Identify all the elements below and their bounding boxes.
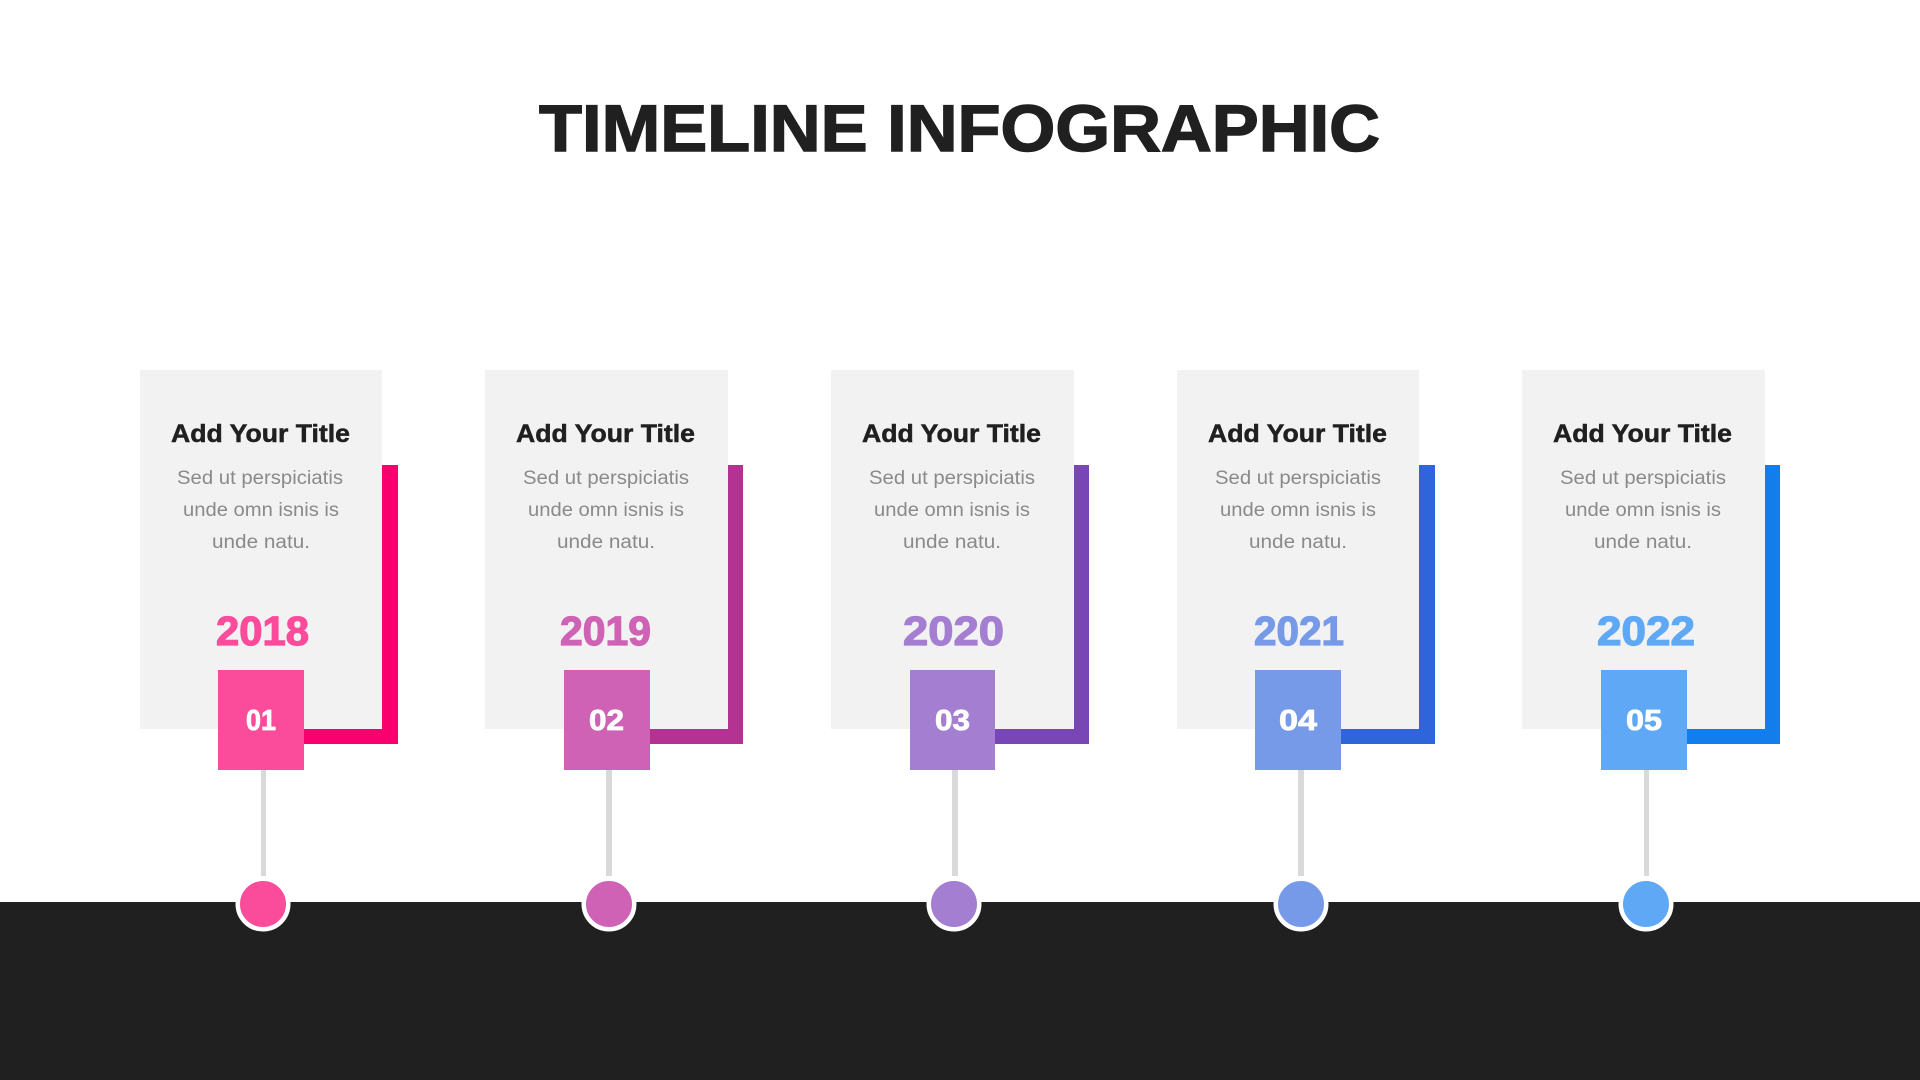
card body text: Sed ut perspiciatis (177, 468, 343, 489)
connector (606, 770, 612, 876)
timeline dot (929, 879, 979, 929)
card body text: unde natu. (1249, 532, 1347, 553)
number: 04 (1279, 705, 1317, 737)
number square (218, 670, 304, 770)
card body text (1560, 468, 1726, 553)
number: 05 (1626, 705, 1662, 737)
card heading: Add Your Title (516, 420, 695, 448)
year: 2018 (216, 608, 309, 654)
connector (261, 770, 266, 876)
card body text: Sed ut perspiciatis (523, 468, 689, 489)
card body text (869, 468, 1035, 553)
card background (1177, 370, 1419, 729)
number square (1255, 670, 1341, 770)
card body text: unde omn isnis is (1565, 500, 1721, 521)
card body text: unde natu. (903, 532, 1001, 553)
card body text: unde omn isnis is (528, 500, 684, 521)
card background (831, 370, 1074, 729)
bracket accent (300, 465, 398, 744)
year: 2021 (1254, 608, 1344, 654)
title: TIMELINE INFOGRAPHIC (539, 91, 1380, 165)
card body text: unde omn isnis is (183, 500, 339, 521)
card body text: unde omn isnis is (1220, 500, 1376, 521)
card body text: unde natu. (212, 532, 310, 553)
card heading: Add Your Title (862, 420, 1041, 448)
number: 03 (935, 705, 970, 737)
number: 02 (589, 705, 624, 737)
dark base band (0, 902, 1920, 1080)
bracket accent (1683, 465, 1780, 744)
card body text: Sed ut perspiciatis (1560, 468, 1726, 489)
year: 2020 (903, 608, 1004, 654)
card background (485, 370, 728, 729)
card heading: Add Your Title (1208, 420, 1387, 448)
year: 2019 (560, 608, 651, 654)
panel: 2022 milestone (1522, 370, 1780, 929)
panel: 2020 milestone (831, 370, 1089, 929)
card body text (1215, 468, 1381, 553)
card heading: Add Your Title (1553, 420, 1732, 448)
card body text: unde omn isnis is (874, 500, 1030, 521)
connector (952, 770, 958, 876)
card body text: Sed ut perspiciatis (869, 468, 1035, 489)
number square (564, 670, 650, 770)
timeline dot (1621, 879, 1671, 929)
year: 2022 (1597, 608, 1695, 654)
card background (140, 370, 382, 729)
card body text: unde natu. (1594, 532, 1692, 553)
card body text: unde natu. (557, 532, 655, 553)
timeline dot (1276, 879, 1326, 929)
panel: 2019 milestone (485, 370, 743, 929)
connector (1644, 770, 1649, 876)
panel: 2018 milestone (140, 370, 398, 929)
connector (1298, 770, 1304, 876)
bracket accent (646, 465, 743, 744)
card background (1522, 370, 1765, 729)
number square (910, 670, 995, 770)
card body text (523, 468, 689, 553)
card heading: Add Your Title (171, 420, 350, 448)
card body text: Sed ut perspiciatis (1215, 468, 1381, 489)
timeline dot (238, 879, 288, 929)
bracket accent (991, 465, 1089, 744)
number square (1601, 670, 1687, 770)
bracket accent (1337, 465, 1435, 744)
number: 01 (246, 705, 276, 737)
timeline dot (584, 879, 634, 929)
card body text (177, 468, 343, 553)
panel: 2021 milestone (1177, 370, 1435, 929)
